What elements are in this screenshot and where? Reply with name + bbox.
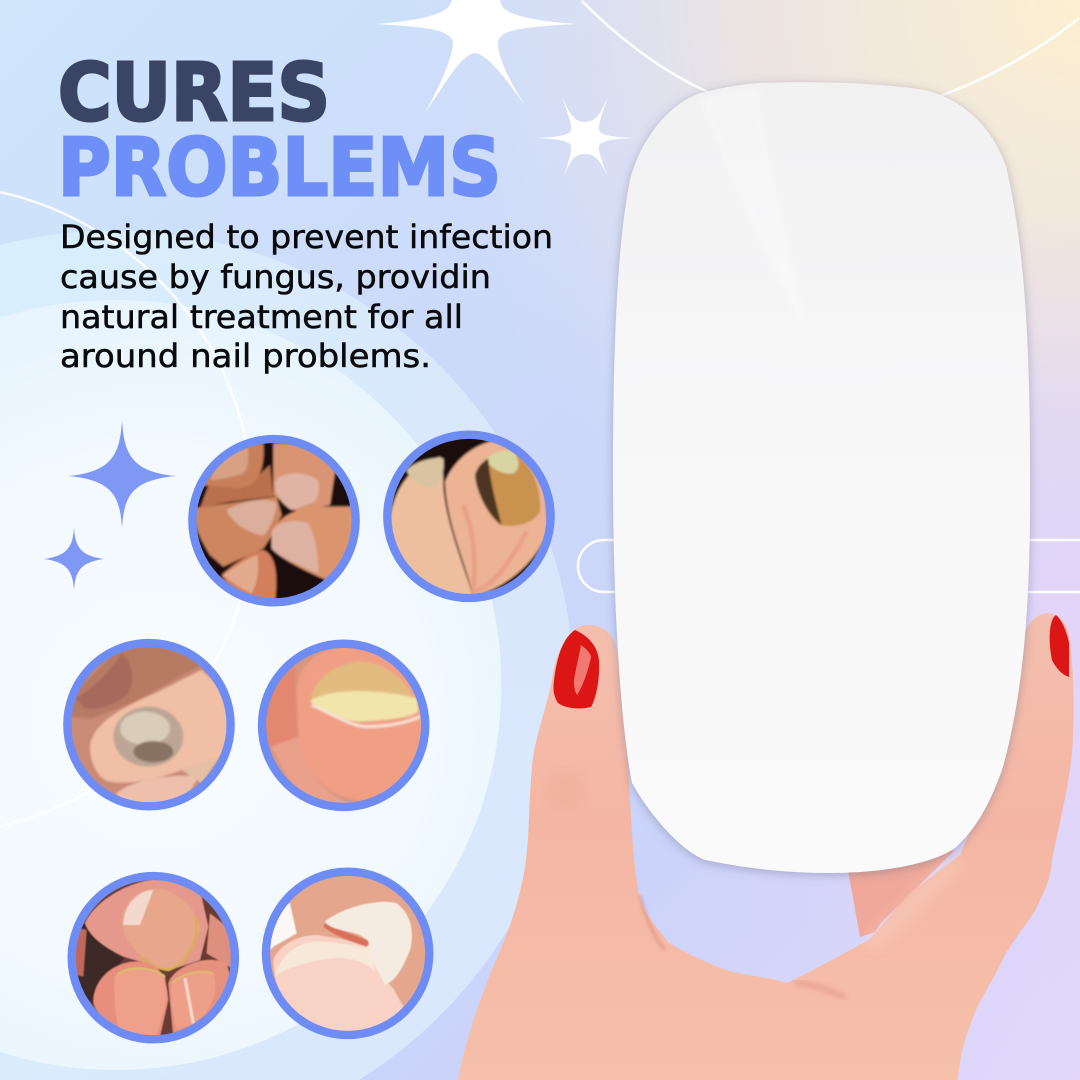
description text: natural treatment for all [60,298,463,336]
description text: around nail problems. [60,337,431,375]
product: white device [613,82,1030,873]
photo: peeling fingernails [192,438,357,602]
photo: ridged nails [72,875,235,1039]
photo: yellow cracked nail [262,643,425,807]
photo: crusted nail [67,643,232,807]
red nails [553,615,1069,708]
title: PROBLEMS [58,122,501,214]
sparkle: small blue [44,527,104,591]
title: CURES [58,47,330,139]
hand holding device [458,613,1074,1080]
description text: Designed to prevent infection [60,218,553,256]
title [58,47,501,214]
description text [60,218,553,375]
sparkle: top large white [375,0,577,113]
skin creases [545,770,960,998]
photo: lifted white nail [265,870,429,1035]
sparkle: small white [537,97,633,177]
palm, thumb and finger [458,613,1074,1080]
photo: dark toenail [387,435,552,598]
description text: cause by fungus, providin [60,258,491,296]
back finger [848,850,955,937]
photo circles row 1: fingers and dark toenail [192,435,552,602]
photo circles row 2: crusted nail and yellow nail [67,643,425,807]
photo circles row 3: ridged nails and lifted nail [72,870,429,1039]
sparkle: large blue [68,420,176,528]
